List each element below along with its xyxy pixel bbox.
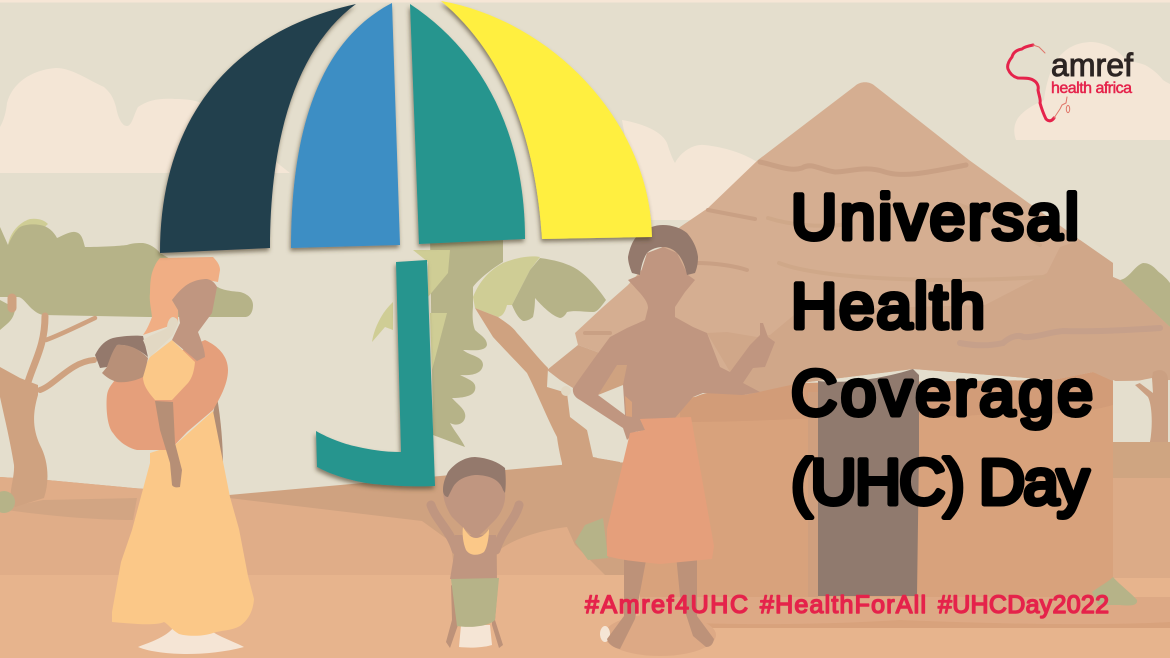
right green bush bbox=[1120, 263, 1170, 330]
panel: blue bbox=[291, 3, 400, 248]
hand wrap bbox=[143, 317, 178, 357]
back arm bbox=[213, 397, 223, 467]
hut bbox=[547, 82, 1170, 628]
right background gap and tree bbox=[1113, 370, 1170, 578]
white foot bbox=[600, 626, 610, 642]
child hair bbox=[443, 457, 506, 497]
hut wall bbox=[640, 372, 1170, 628]
background clouds bbox=[0, 42, 1170, 220]
panel: teal bbox=[410, 4, 525, 244]
foliage mass bbox=[0, 224, 253, 330]
child arms bbox=[431, 505, 519, 550]
light frond left top bbox=[413, 250, 450, 297]
hut door bbox=[818, 369, 919, 596]
child shorts bbox=[451, 578, 499, 627]
right frond dark bbox=[512, 258, 606, 321]
amref logo bbox=[1008, 45, 1133, 121]
title line 2: Health bbox=[791, 270, 985, 342]
light dot near elbow bbox=[561, 386, 571, 396]
right frond light bbox=[473, 256, 540, 317]
palm plant bbox=[372, 236, 606, 447]
face and neck bbox=[172, 279, 217, 361]
light frond middle bbox=[430, 313, 447, 370]
child torso bbox=[450, 535, 497, 579]
child head bbox=[443, 470, 505, 538]
branches bbox=[12, 298, 95, 390]
title line 3: Coverage bbox=[791, 357, 1093, 429]
small green bush near skirt bbox=[575, 518, 608, 560]
light foliage highlight bbox=[8, 219, 48, 245]
child necklace bbox=[463, 527, 489, 555]
icon: africa outline bbox=[1008, 45, 1070, 121]
left acacia tree bbox=[0, 298, 95, 507]
ground shadow bbox=[604, 614, 716, 656]
trunk bbox=[0, 367, 47, 507]
small green bush left bbox=[0, 491, 15, 513]
roof thatch stripes bbox=[585, 162, 1160, 345]
brown tree left of hut bbox=[475, 308, 640, 500]
skirt bbox=[607, 417, 714, 564]
panel: dark navy bbox=[160, 4, 356, 253]
bodice bbox=[143, 340, 195, 400]
headscarf bbox=[143, 257, 220, 335]
light frond far left bbox=[372, 302, 393, 342]
light gap under arm bbox=[570, 393, 630, 462]
waist shade bbox=[625, 396, 632, 417]
lower left roof shade bbox=[547, 345, 600, 388]
hashtag 1: #Amref4UHC bbox=[585, 591, 748, 619]
title line 4: (UHC) Day bbox=[791, 446, 1089, 518]
door sill bbox=[818, 590, 917, 596]
body and arms bbox=[573, 247, 775, 440]
armpit shade bbox=[598, 365, 627, 395]
feet bbox=[138, 627, 244, 654]
hashtags bbox=[585, 591, 1109, 619]
light arm gap bbox=[598, 385, 625, 415]
standing woman figure bbox=[561, 225, 775, 656]
hashtag 2: #HealthForAll bbox=[760, 591, 926, 619]
umbrella bbox=[160, 1, 652, 486]
baby hair bbox=[95, 336, 148, 368]
ground layers bbox=[0, 440, 1170, 658]
title line 1: Universal bbox=[791, 181, 1079, 253]
hut roof bbox=[575, 82, 1170, 395]
child legs bbox=[446, 585, 503, 648]
wall upper shade bbox=[680, 372, 1113, 422]
umbrella handle bbox=[316, 260, 435, 486]
title bbox=[791, 181, 1093, 518]
sling bbox=[107, 340, 228, 450]
green bush by hut bbox=[1092, 577, 1137, 605]
door frame shade bbox=[808, 392, 818, 598]
front arm bbox=[155, 401, 182, 487]
logo tagline: health africa bbox=[1051, 80, 1132, 97]
legs bbox=[607, 555, 714, 649]
baby face bbox=[102, 345, 148, 382]
mother figure bbox=[95, 257, 254, 654]
left acacia foliage bbox=[0, 219, 253, 330]
palm trunk and fronds bbox=[430, 236, 503, 447]
hair bbox=[628, 225, 698, 275]
child figure bbox=[431, 457, 519, 648]
wall foot strip bbox=[640, 597, 1170, 624]
dress bbox=[112, 411, 254, 636]
child feet bbox=[459, 625, 492, 648]
logo wordmark: amref bbox=[1051, 47, 1133, 83]
hashtag 3: #UHCDay2022 bbox=[938, 591, 1109, 619]
panel: yellow bbox=[441, 1, 652, 239]
roof shading bbox=[707, 240, 1170, 395]
